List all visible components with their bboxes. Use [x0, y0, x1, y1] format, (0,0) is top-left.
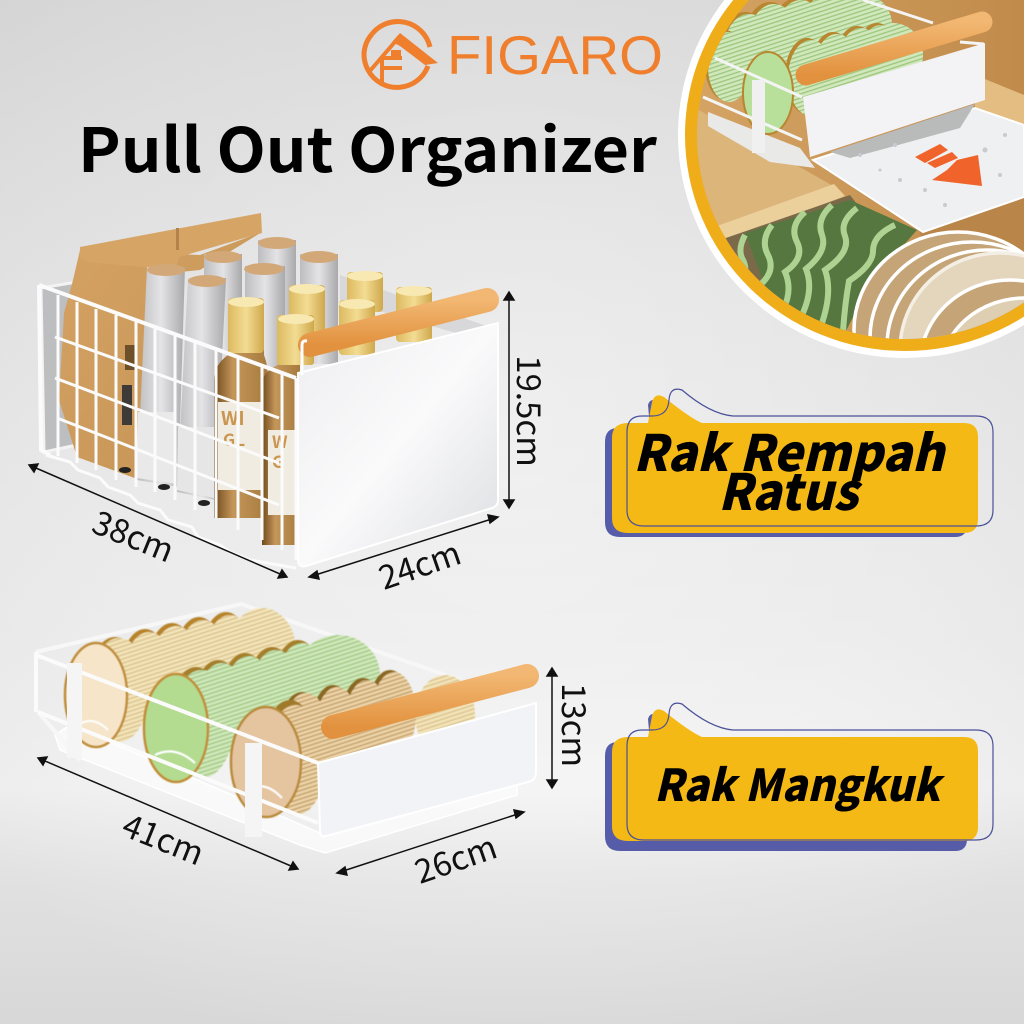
inset yellow ring: [685, 0, 1024, 351]
gold capped bottles: [214, 271, 432, 545]
transparent drip tray: [55, 725, 517, 853]
cream bowls: [65, 608, 296, 747]
dimension: 19.5cm: 19.5cm: [507, 355, 555, 467]
gold capped bottles: G: [272, 448, 284, 473]
drawer tray: [708, 112, 815, 168]
callout blue shadow: [605, 714, 967, 851]
white panel: [803, 43, 985, 157]
dimension: 38cm: 38cm: [86, 496, 182, 572]
dimension: 41cm: [38, 757, 298, 875]
tan bowls: [231, 670, 475, 817]
logo: Figaro: [364, 21, 663, 87]
callout label line 2: Ratus: [718, 453, 863, 525]
dimension: 24cm: 24cm: [371, 527, 467, 600]
gold capped bottles: GL: [223, 426, 245, 451]
rack back plate: [41, 275, 498, 452]
kraft paper bag: [59, 213, 262, 480]
green bowls: [144, 635, 380, 782]
rack wires: [703, 0, 984, 153]
spice rack basket: [39, 213, 498, 568]
dimension: 26cm: [337, 810, 524, 894]
wooden handle: [806, 22, 982, 75]
dimension: 19.5cm: [504, 292, 555, 508]
rack rear frame: [36, 604, 460, 760]
inset circle: pull out drawer close-up: [678, 0, 1024, 358]
inset photo: [697, 0, 1024, 339]
callout: Rak Rempah Ratus: [605, 389, 993, 537]
dimension: 26cm: 26cm: [407, 821, 503, 894]
dimension: 38cm: [29, 464, 287, 578]
callout outline: [627, 703, 993, 840]
green bowls: [705, 0, 923, 134]
wooden handle: [302, 300, 487, 375]
grey bottles: [119, 237, 338, 506]
dimension: 13cm: 13cm: [552, 683, 600, 767]
icon: house in circle: [364, 21, 438, 87]
front metal panel: [298, 323, 498, 566]
front white panel: [318, 703, 536, 836]
gold capped bottles: WI: [221, 404, 245, 431]
title: Pull Out Organizer: [78, 101, 657, 190]
wire basket side: [39, 285, 296, 568]
rack front rails: [36, 652, 318, 837]
dimension: 13cm: [547, 668, 600, 788]
callout outline: [627, 389, 993, 526]
gold capped bottles: W: [272, 428, 288, 453]
icon: orange arrow: [915, 144, 982, 186]
dimension: 24cm: [309, 515, 498, 600]
inset white ring: [678, 0, 1024, 358]
logo wordmark: FIGARO: [447, 24, 663, 86]
water drops: [858, 133, 1007, 207]
callout yellow body: [612, 395, 978, 533]
green plates: [739, 200, 917, 337]
callout label: Rak Mangkuk: [654, 750, 946, 814]
bowl rack basket: [36, 604, 536, 853]
callout blue shadow: [605, 400, 967, 537]
callout label line 1: Rak Rempah: [633, 414, 947, 486]
dimension: 41cm: 41cm: [116, 799, 212, 875]
callout: Rak Mangkuk: [605, 703, 993, 851]
beige plates: [852, 230, 1024, 339]
wooden handle: [333, 676, 527, 727]
callout yellow body: [612, 709, 978, 841]
